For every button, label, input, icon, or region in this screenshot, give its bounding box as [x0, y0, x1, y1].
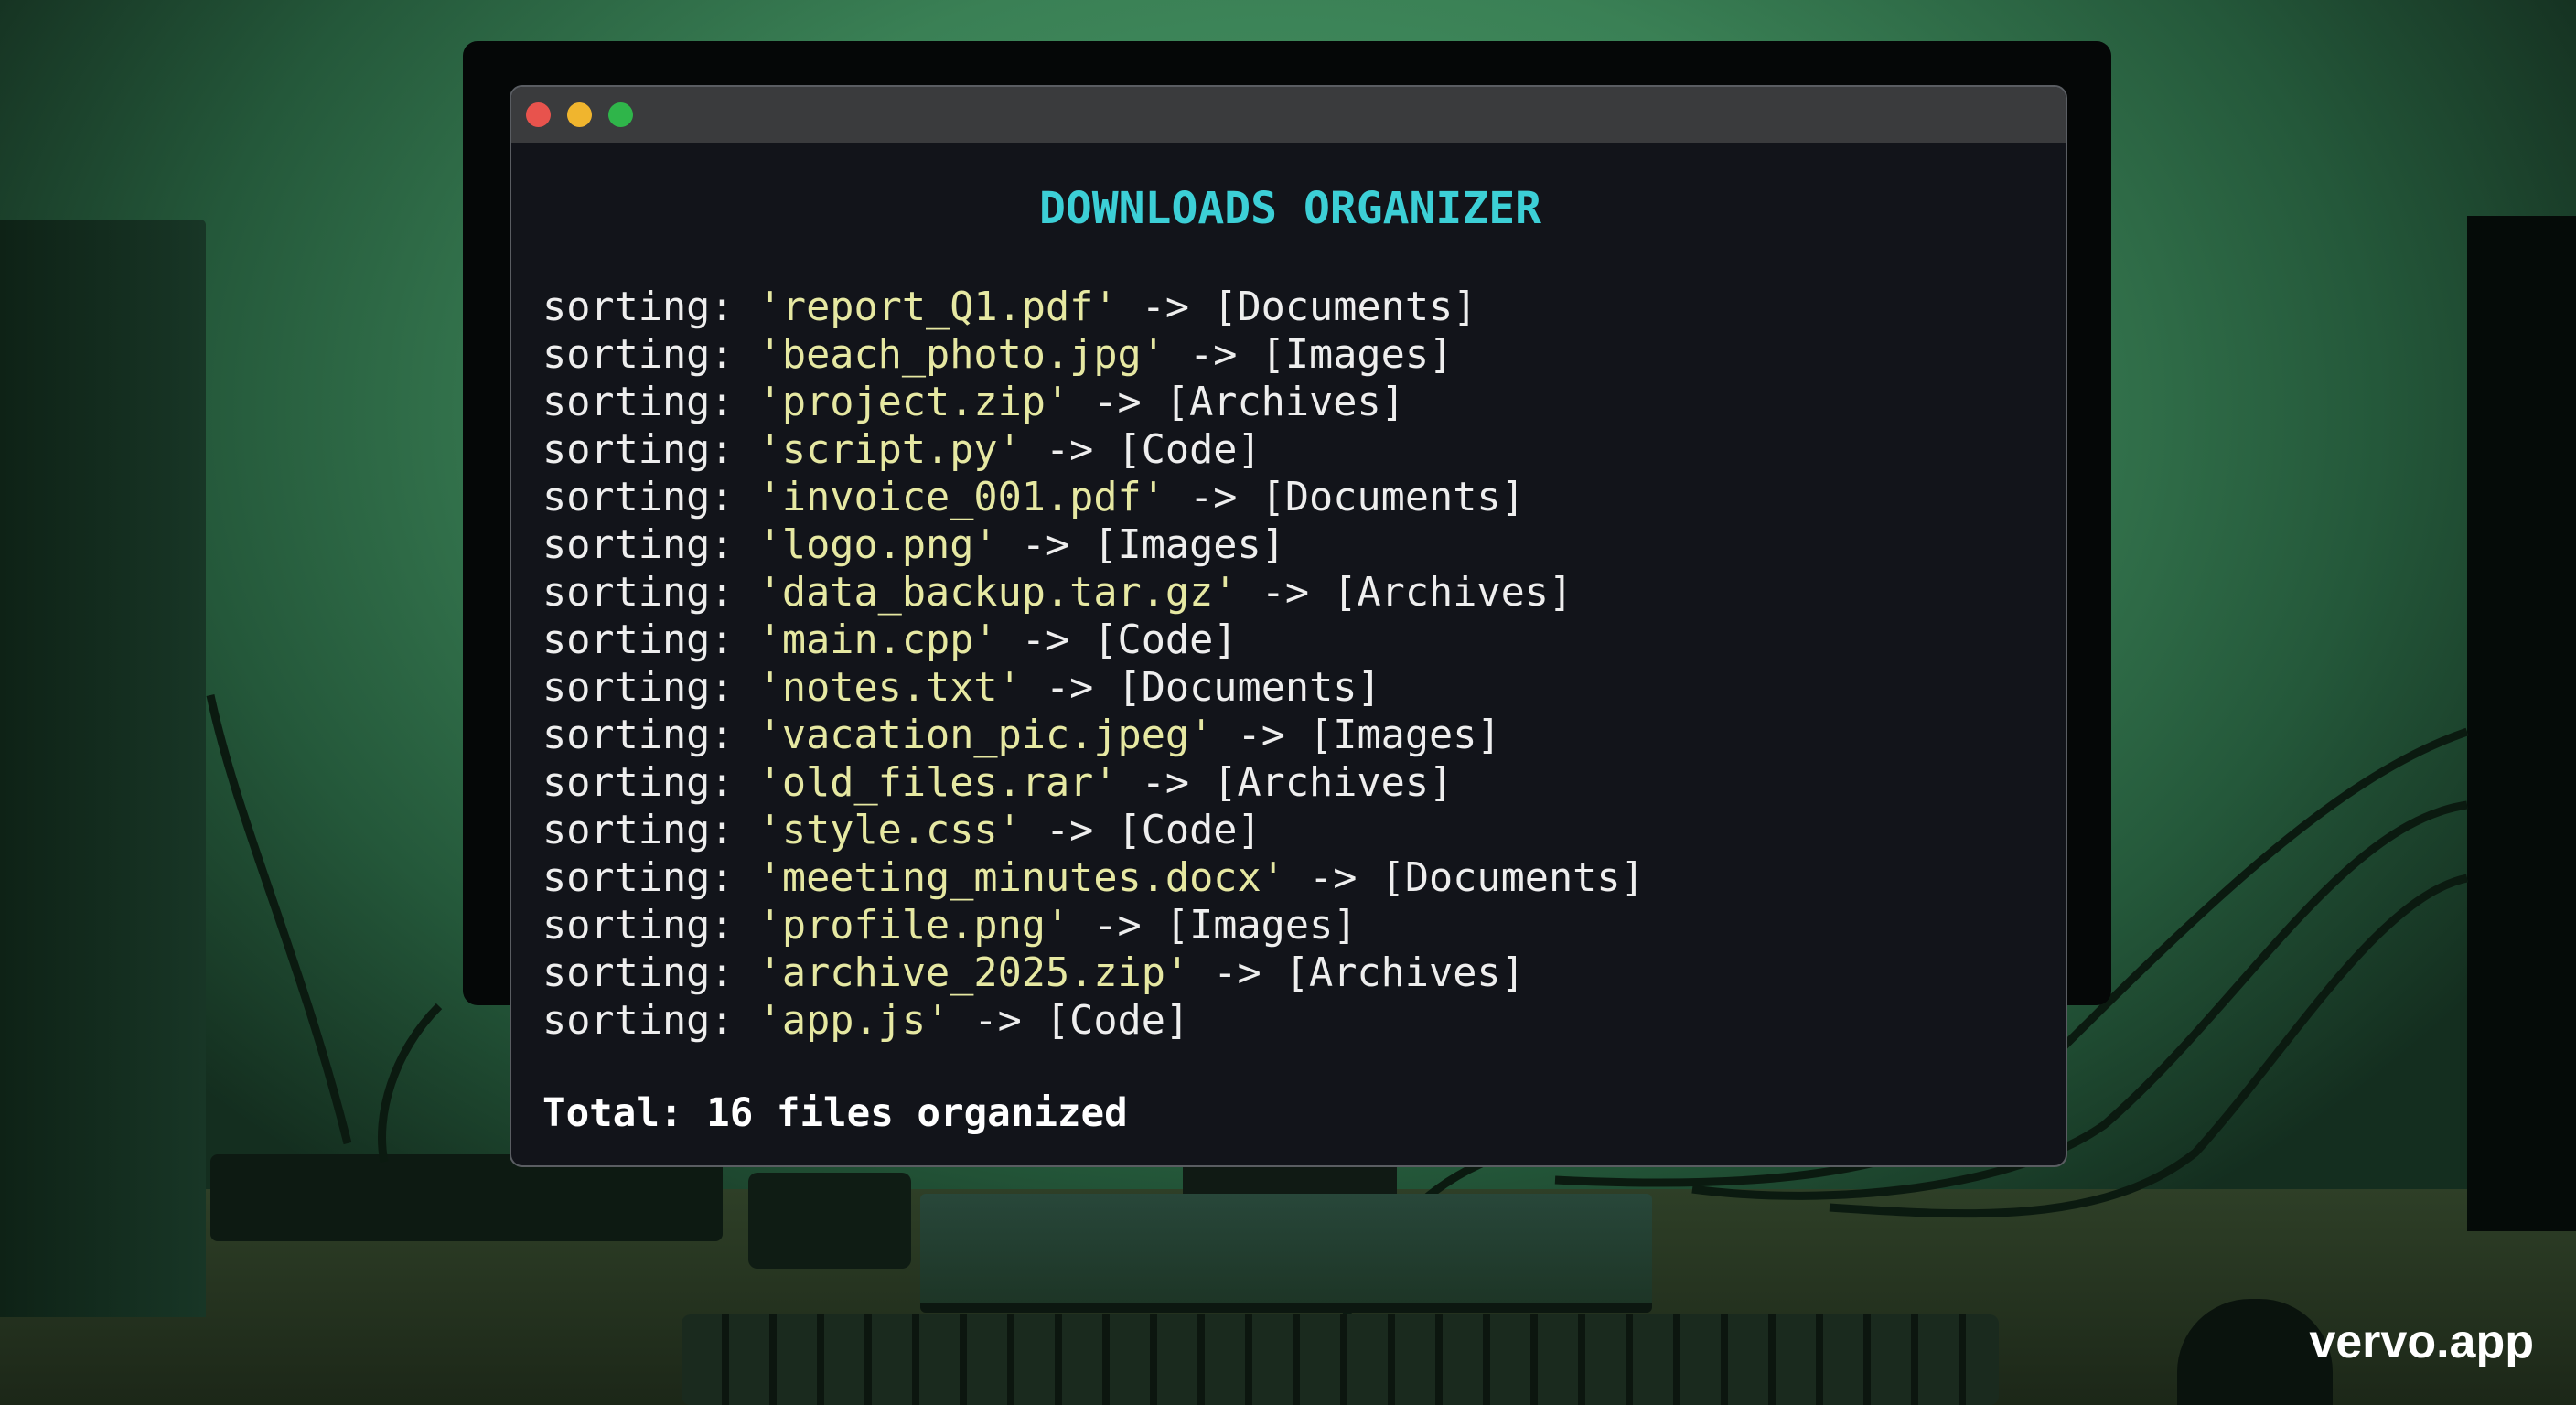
right computer tower — [2467, 216, 2576, 1231]
sorting log lines: sorting: 'app.js' -> [Code] — [542, 998, 1189, 1044]
sorting log lines: sorting: 'data_backup.tar.gz' -> [Archives] — [542, 570, 1572, 616]
sorting log lines: sorting: 'main.cpp' -> [Code] — [542, 617, 1238, 663]
mouse — [2177, 1299, 2333, 1405]
sorting log lines: sorting: 'invoice_001.pdf' -> [Documents] — [542, 475, 1525, 520]
terminal window — [510, 85, 2067, 1167]
sorting log lines: sorting: 'logo.png' -> [Images] — [542, 522, 1285, 568]
left computer tower — [0, 220, 206, 1317]
sorting log lines: sorting: 'vacation_pic.jpeg' -> [Images] — [542, 713, 1501, 758]
monitor bezel — [463, 41, 2111, 1005]
sorting log lines: sorting: 'meeting_minutes.docx' -> [Documents] — [542, 855, 1645, 901]
sorting log lines: sorting: 'style.css' -> [Code] — [542, 808, 1261, 853]
small speaker box — [748, 1173, 911, 1269]
sorting log lines: sorting: 'project.zip' -> [Archives] — [542, 380, 1405, 425]
sorting log lines: sorting: 'old_files.rar' -> [Archives] — [542, 760, 1453, 806]
sorting log lines: sorting: 'profile.png' -> [Images] — [542, 903, 1357, 949]
total summary: Total: 16 files organized — [542, 1091, 1128, 1136]
desk surface — [0, 1189, 2576, 1405]
monitor stand neck — [1183, 1162, 1397, 1253]
title bar with traffic lights — [511, 87, 2069, 143]
sorting log lines: sorting: 'report_Q1.pdf' -> [Documents] — [542, 284, 1476, 330]
sorting log lines: sorting: 'beach_photo.jpg' -> [Images] — [542, 332, 1453, 378]
sorting log lines: sorting: 'archive_2025.zip' -> [Archives] — [542, 950, 1525, 996]
sorting log lines: sorting: 'script.py' -> [Code] — [542, 427, 1261, 473]
sorting log lines — [542, 284, 1645, 1044]
sorting log lines: sorting: 'notes.txt' -> [Documents] — [542, 665, 1381, 711]
keyboard — [682, 1314, 1999, 1405]
terminal title: DOWNLOADS ORGANIZER — [1039, 183, 1541, 234]
monitor stand base — [920, 1194, 1652, 1313]
watermark: vervo.app — [2309, 1315, 2534, 1368]
power strip — [210, 1154, 723, 1241]
